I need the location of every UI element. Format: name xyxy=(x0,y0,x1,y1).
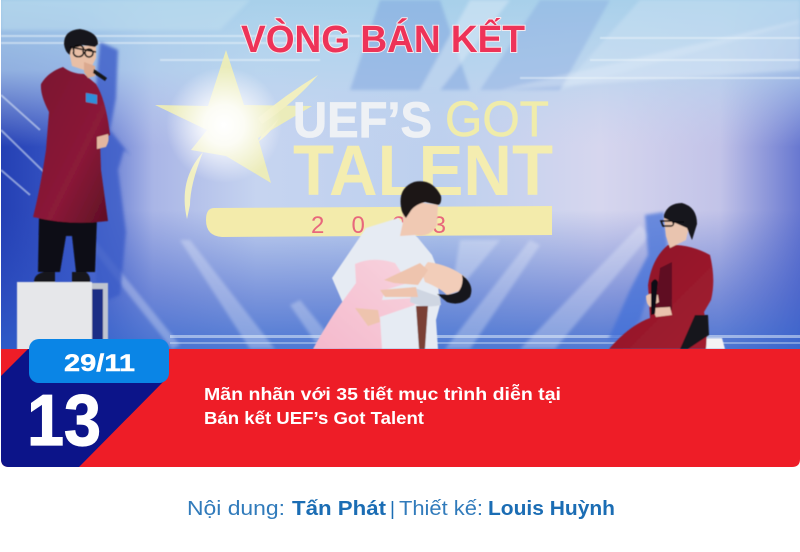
logo year bar xyxy=(206,206,552,239)
man face xyxy=(400,200,438,236)
credits: Thiết kế: xyxy=(399,497,483,520)
banner red base xyxy=(1,349,800,467)
backdrop shadow right performer xyxy=(608,212,668,340)
performer left on box xyxy=(17,29,110,350)
date pill xyxy=(29,339,169,383)
credits: | xyxy=(390,499,395,520)
banner xyxy=(1,339,800,467)
headline text xyxy=(204,383,561,428)
ponytail xyxy=(416,306,428,349)
woman hair xyxy=(437,275,471,304)
logo text UEF'S GOT TALENT xyxy=(294,100,552,195)
man hair xyxy=(401,181,441,218)
heading: vòng bán kết: VÒNG BÁN KẾT xyxy=(241,17,525,61)
backdrop shadow left performer xyxy=(94,41,128,300)
performers center dance couple xyxy=(313,181,471,349)
logo text UEF'S GOT TALENT: UEF’S xyxy=(293,92,432,148)
woman face xyxy=(423,262,465,295)
credits: Tấn Phát xyxy=(292,497,386,520)
credits: Nội dung: xyxy=(187,497,285,520)
logo star xyxy=(155,50,318,219)
man robe xyxy=(332,218,440,349)
woman arm sleeve xyxy=(410,287,441,306)
man hands xyxy=(355,263,428,326)
date pill: 29/11 xyxy=(64,350,135,377)
logo text UEF'S GOT TALENT: GOT xyxy=(445,91,549,147)
banner navy corner xyxy=(1,349,165,467)
headline text: Bán kết UEF’s Got Talent xyxy=(204,408,424,428)
logo text UEF'S GOT TALENT: TALENT xyxy=(293,132,553,211)
headline text: Mãn nhãn với 35 tiết mục trình diễn tại xyxy=(204,383,561,404)
issue number: 13 xyxy=(27,381,101,461)
logo year bar: 2 0 2 3 xyxy=(311,212,446,239)
box xyxy=(17,282,108,350)
woman dress xyxy=(313,260,415,349)
credits xyxy=(187,497,615,520)
performer right seated xyxy=(609,203,725,349)
credits: Louis Huỳnh xyxy=(488,497,615,520)
stage photo backdrop xyxy=(1,0,800,350)
